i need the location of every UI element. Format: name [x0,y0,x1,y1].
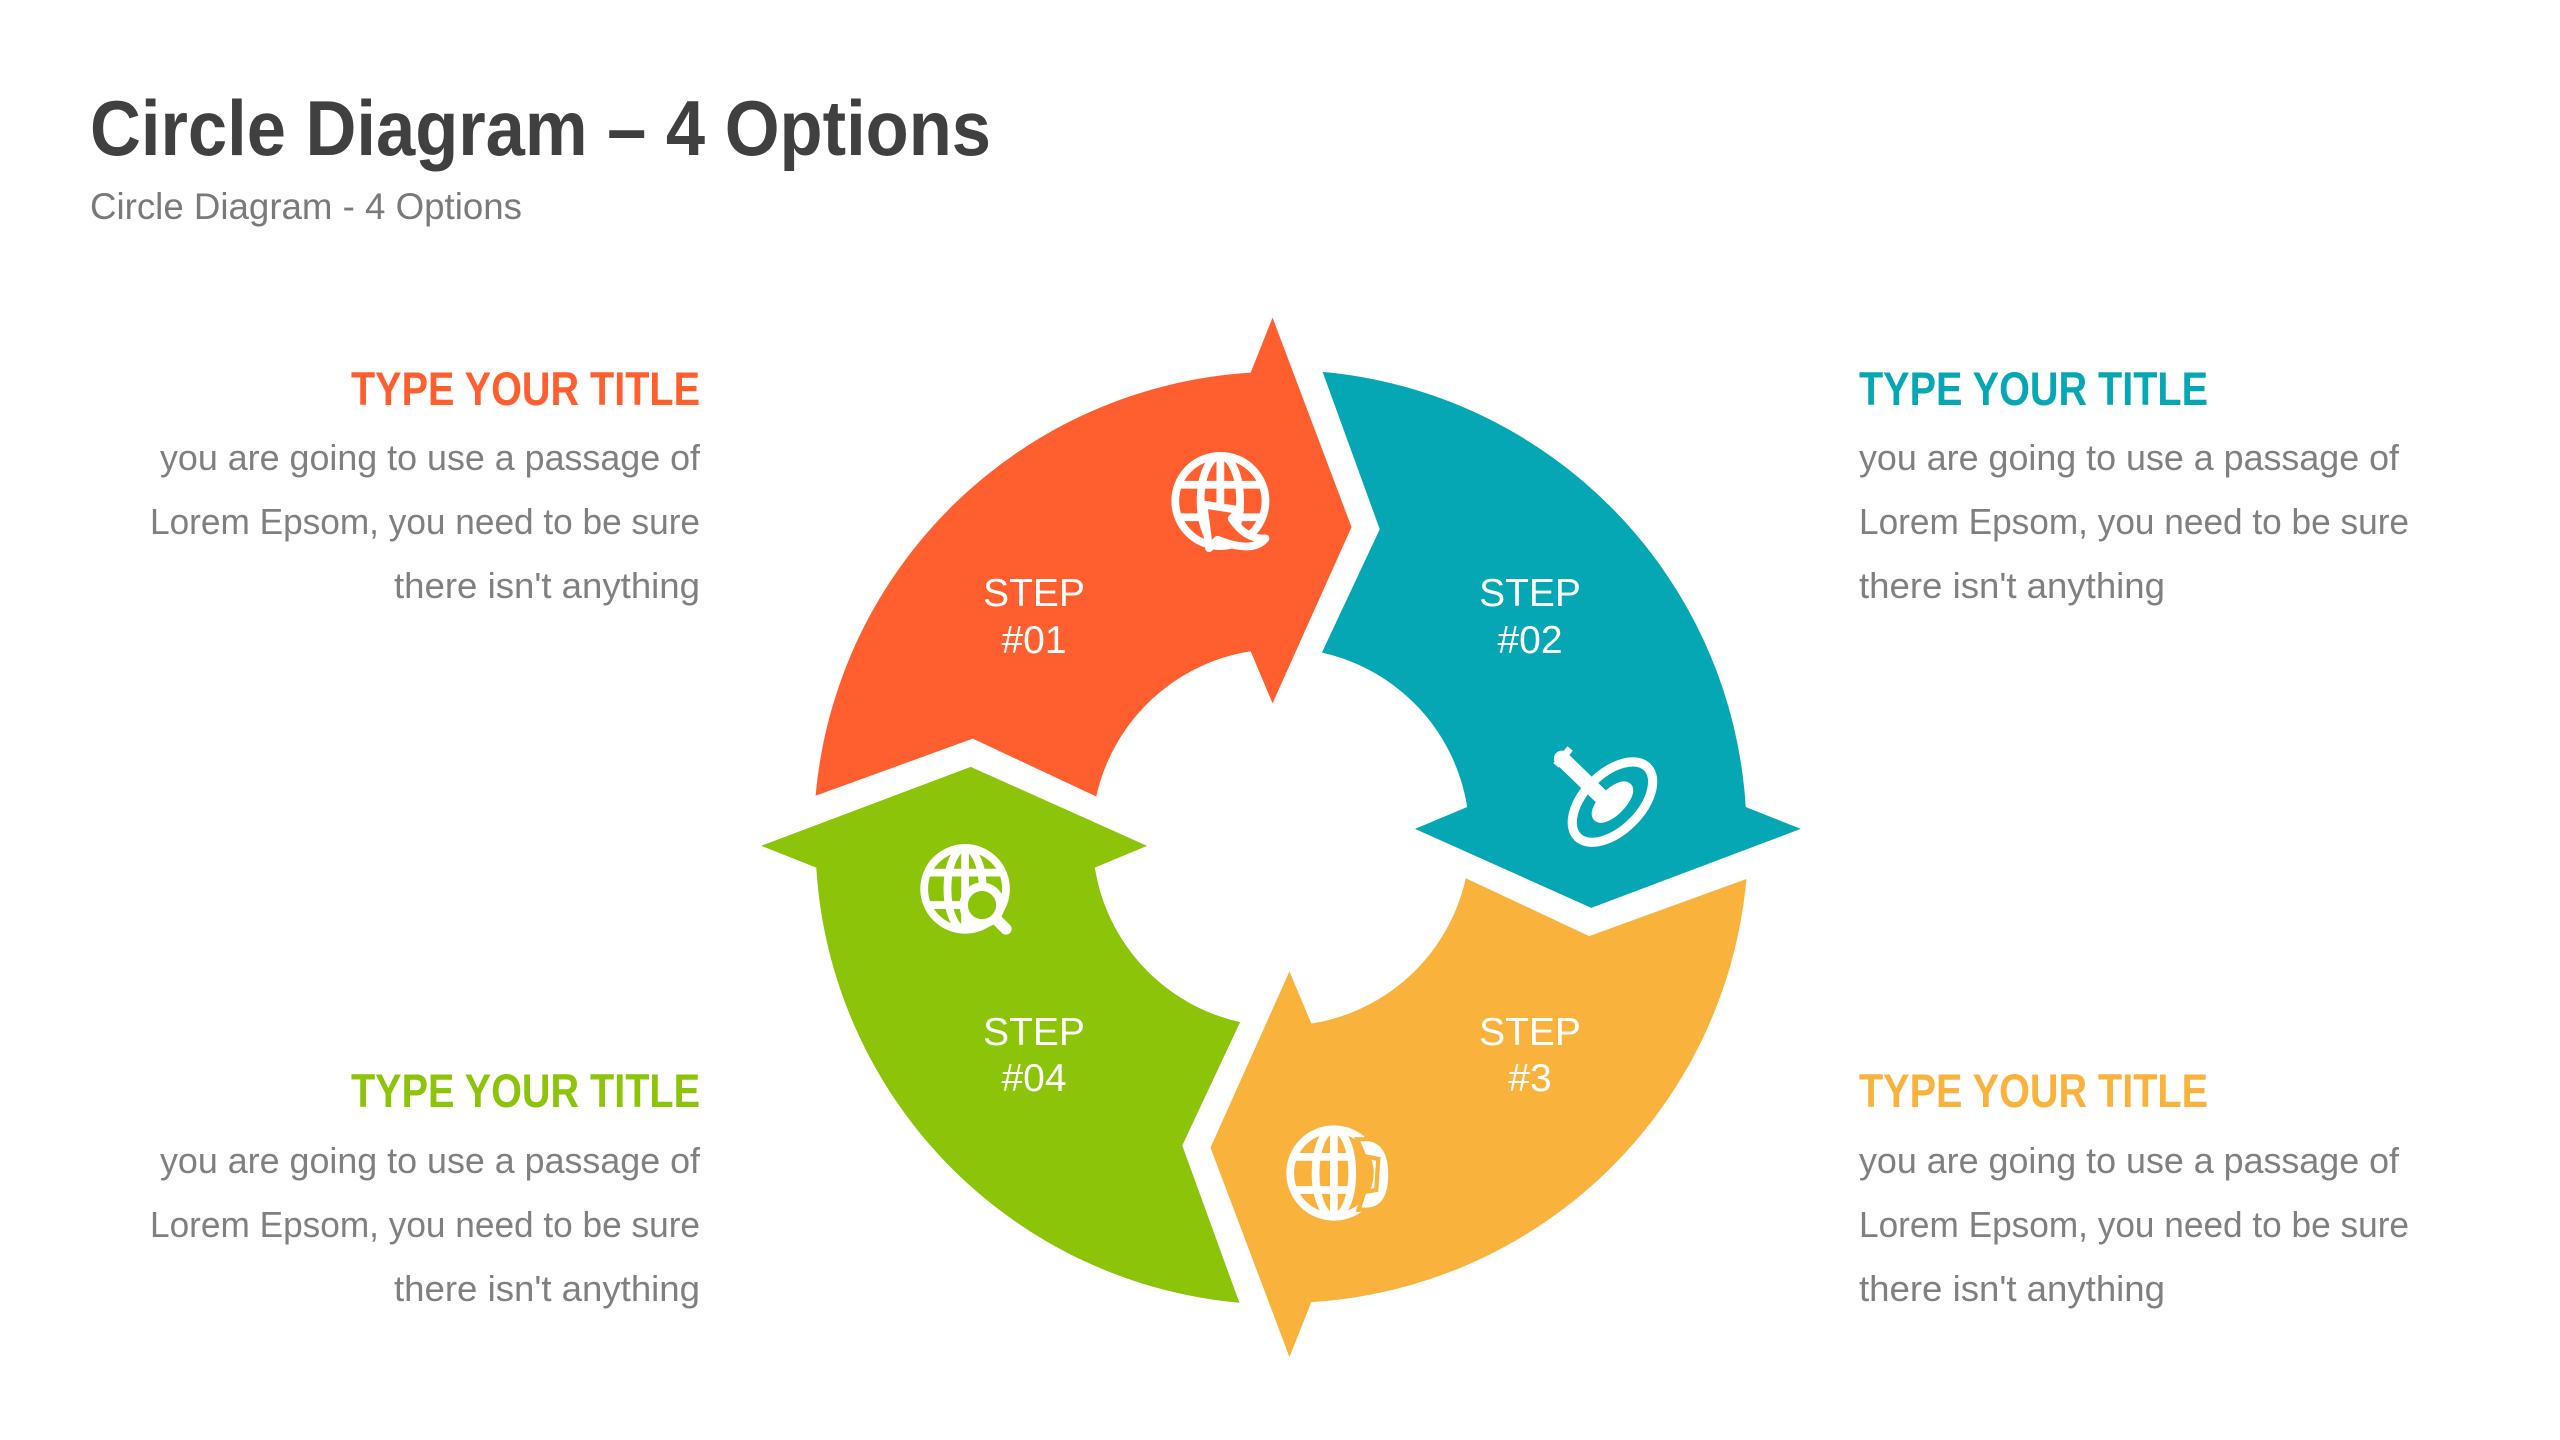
step label 02: #02 [1497,619,1563,662]
icon: target with dart [1556,747,1667,857]
step label 04: STEP [983,1011,1085,1054]
text block: bottom right: Lorem Epsom, you need to be sure [1859,1204,2409,1245]
step label 01: #01 [1001,619,1067,662]
step label 04 [983,1011,1085,1100]
text block: bottom right: TYPE YOUR TITLE [1859,1064,2208,1117]
text block: top right: Lorem Epsom, you need to be sure [1859,501,2409,542]
segment: step 03 yellow [1210,878,1746,1357]
title: Circle Diagram – 4 Options [90,84,991,172]
text block: top left [150,362,701,606]
text block: top left: Lorem Epsom, you need to be sure [150,501,700,542]
step label 3: STEP [1479,1011,1581,1054]
icon: globe with phone [1290,1129,1390,1217]
text block: bottom right: there isn't anything [1859,1268,2165,1309]
text block: bottom left: Lorem Epsom, you need to be sure [150,1204,700,1245]
step label 01 [983,572,1085,662]
icon: globe with magnifier [924,848,1006,930]
step label 02: STEP [1479,572,1581,615]
text block: bottom left: TYPE YOUR TITLE [351,1064,700,1117]
text block: top right: you are going to use a passage of [1859,437,2400,478]
step label 04: #04 [1001,1057,1067,1100]
text block: bottom right: you are going to use a passage of [1859,1140,2400,1181]
step label 02 [1479,572,1581,662]
text block: top right: there isn't anything [1859,565,2165,606]
step label 3: #3 [1508,1057,1552,1100]
subtitle: Circle Diagram - 4 Options [90,186,522,227]
text block: bottom right [1859,1064,2409,1309]
text block: bottom left [150,1064,701,1309]
text block: top left: you are going to use a passage of [160,437,701,478]
text block: top left: TYPE YOUR TITLE [351,362,700,415]
text block: bottom left: you are going to use a passage of [160,1140,701,1181]
circle diagram [761,318,1801,1357]
segment: step 02 teal [1322,372,1801,908]
segment: step 04 green [761,767,1240,1303]
step label 3 [1479,1011,1581,1100]
text block: top left: there isn't anything [394,565,700,606]
text block: bottom left: there isn't anything [394,1268,700,1309]
step label 01: STEP [983,572,1085,615]
text block: top right [1859,362,2409,606]
icon: globe with cursor [1175,456,1265,548]
text block: top right: TYPE YOUR TITLE [1859,362,2208,415]
segment: step 01 orange [816,318,1352,796]
